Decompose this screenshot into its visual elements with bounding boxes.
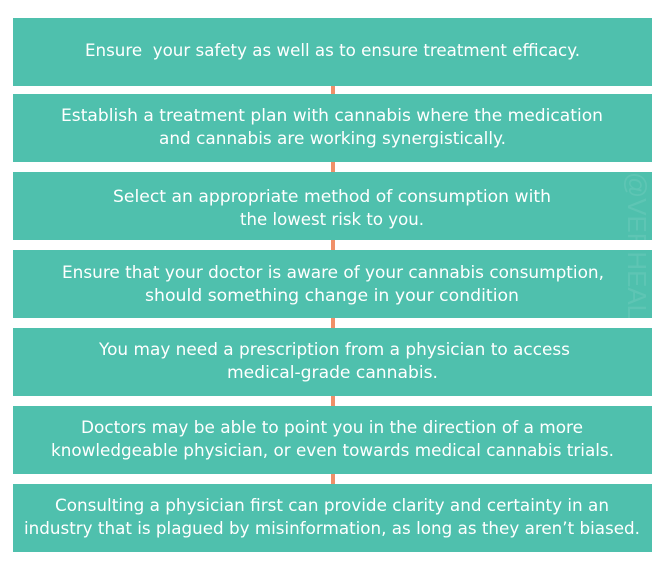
step 5 — [13, 328, 652, 396]
step 2: Establish a treatment plan with cannabis where the medication — [61, 106, 603, 125]
watermark: @VERHEAL — [622, 172, 652, 319]
step 6 — [13, 406, 652, 474]
step 4 — [13, 250, 652, 318]
step 3: Select an appropriate method of consumption with — [113, 187, 551, 206]
step 2 — [13, 94, 652, 162]
step 4: should something change in your condition — [145, 286, 519, 305]
step 6: knowledgeable physician, or even towards medical cannabis trials. — [51, 441, 614, 460]
step 2: and cannabis are working synergistically. — [159, 129, 506, 148]
step 7: Consulting a physician first can provide clarity and certainty in an — [55, 496, 609, 515]
step 3: the lowest risk to you. — [240, 210, 424, 229]
step 5: medical-grade cannabis. — [227, 363, 438, 382]
step 7: industry that is plagued by misinformation, as long as they aren’t biased. — [24, 519, 640, 538]
step 4: Ensure that your doctor is aware of your cannabis consumption, — [62, 263, 604, 282]
step 7 — [13, 484, 652, 552]
step 5: You may need a prescription from a physician to access — [98, 340, 570, 359]
step 1: Ensure your safety as well as to ensure treatment efficacy. — [85, 41, 580, 60]
step 6: Doctors may be able to point you in the direction of a more — [81, 418, 583, 437]
step 3 — [13, 172, 652, 240]
connector line — [331, 86, 335, 484]
step 1 — [13, 18, 652, 86]
